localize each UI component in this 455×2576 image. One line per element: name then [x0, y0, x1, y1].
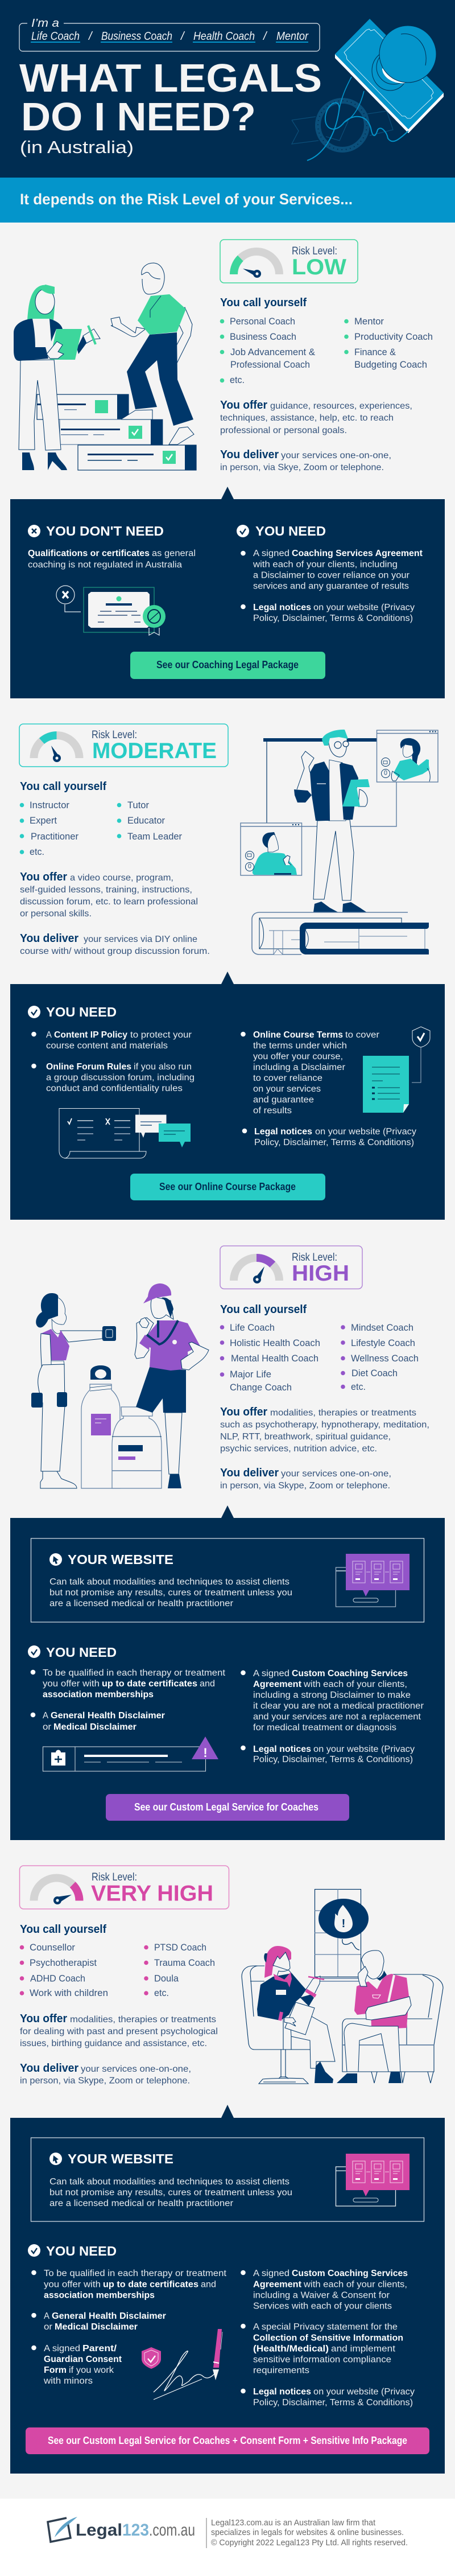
list: right column — [241, 1669, 424, 1764]
button: coaching package — [130, 652, 325, 679]
you call yourself: very high: PTSD Coach — [154, 1942, 206, 1953]
you deliver: low: You deliver — [220, 448, 279, 461]
footer text — [211, 2518, 408, 2548]
list: you need: services and any guarantee of results — [253, 582, 409, 591]
list: right column: Legal notices — [253, 2387, 311, 2397]
title: WHAT LEGALS — [19, 56, 322, 100]
text: qualifications: as general — [152, 549, 196, 558]
panel: very high risk requirements — [10, 2105, 445, 2474]
list: you need: with each of your clients, including — [253, 560, 398, 569]
you call yourself: low: Business Coach — [230, 331, 296, 342]
you offer: moderate: discussion forum, etc. to learn professional — [20, 897, 198, 907]
list: left column: General Health Disclaimer — [52, 2311, 166, 2321]
you deliver: moderate: your services via DIY online — [84, 935, 197, 944]
you call yourself: high: Wellness Coach — [351, 1353, 419, 1364]
heading: you need: YOU NEED — [46, 1005, 117, 1019]
list: left column: a group discussion forum, including — [46, 1073, 195, 1083]
you call yourself: low: Finance & — [354, 347, 396, 357]
you call yourself: very high: ADHD Coach — [30, 1973, 85, 1984]
title: DO I NEED? — [21, 94, 256, 139]
I'm a role box: Health Coach — [193, 30, 255, 43]
you call yourself: moderate: etc. — [30, 846, 44, 857]
list: left column: association memberships — [43, 1690, 154, 1699]
you deliver: low: your services one-on-one, — [281, 451, 391, 460]
illustration: online teacher on books — [241, 730, 438, 954]
you call yourself: very high: Psychotherapist — [30, 1957, 97, 1968]
illustration: counsellor and client — [242, 1889, 443, 2084]
illustration: fitness coach and client — [31, 1283, 209, 1488]
list: right column: and guarantee — [253, 1095, 314, 1105]
you deliver: very high: You deliver — [20, 2062, 78, 2075]
gauge: low — [230, 248, 283, 278]
list: right column: Legal notices — [253, 1744, 311, 1754]
risk level badge: moderate: MODERATE — [92, 739, 217, 763]
video window: left — [241, 823, 301, 875]
your website box: YOUR WEBSITE — [68, 1552, 173, 1567]
your website box: Can talk about modalities and techniques to assist clients — [49, 2177, 289, 2187]
you call yourself: moderate: Practitioner — [31, 831, 78, 842]
thought bubble with flame: ! — [342, 1917, 345, 1930]
list: left column: up to date certificates — [103, 2280, 198, 2289]
button: online course package: See our Online Course Package — [159, 1181, 296, 1192]
footer text: © Copyright 2022 Legal123 Pty Ltd. All rights reserved. — [211, 2538, 408, 2548]
list: right column: to cover — [345, 1030, 379, 1040]
you call yourself: very high — [20, 1923, 215, 1998]
subtitle: (in Australia) — [20, 137, 134, 157]
illustration: stamp and seal — [292, 19, 444, 161]
list: you need: Coaching Services Agreement — [292, 549, 423, 558]
you call yourself: low: Budgeting Coach — [354, 359, 427, 370]
you call yourself: low: Mentor — [354, 316, 384, 327]
list: left column: Guardian Consent — [44, 2355, 122, 2364]
you call yourself: moderate: You call yourself — [20, 780, 106, 793]
you deliver: high: You deliver — [220, 1467, 279, 1479]
illustration: medical disclaimer warning: ! — [203, 1746, 208, 1760]
client with dumbbells — [31, 1293, 116, 1488]
you offer: moderate: self-guided lessons, training, instructions, — [20, 885, 192, 895]
heading: you need: YOU NEED — [46, 2244, 117, 2258]
you call yourself: high — [220, 1303, 419, 1393]
you offer: high: You offer — [220, 1406, 267, 1418]
you offer: moderate: You offer — [20, 871, 67, 883]
button: custom legal service: See our Custom Legal Service for Coaches — [134, 1801, 318, 1813]
list: left column: Form — [44, 2365, 67, 2375]
list: right column: including a Waiver & Consent for — [253, 2290, 390, 2301]
heading: you need: YOU NEED — [46, 1645, 117, 1660]
you offer: high: psychic services, nutrition advice, etc. — [220, 1444, 377, 1454]
list: right column: on your website (Privacy — [313, 2387, 415, 2397]
risk level badge: low — [220, 240, 358, 283]
list: left column: association memberships — [44, 2290, 155, 2301]
risk level badge: very high: VERY HIGH — [91, 1882, 213, 1906]
list: right column: on your website (Privacy — [315, 1127, 416, 1137]
teacher figure — [294, 730, 370, 912]
I'm a role box: / — [88, 30, 93, 43]
your website box — [31, 1538, 424, 1622]
logo: Legal123: .com.au — [149, 2521, 195, 2540]
list: right column — [241, 2269, 415, 2408]
button: custom package: See our Custom Legal Service for Coaches + Consent Form + Sensitive Info Package — [48, 2435, 407, 2446]
you offer: very high: You offer — [20, 2013, 67, 2025]
stacked checklists — [37, 394, 196, 470]
list: right column: Online Course Terms — [253, 1030, 343, 1040]
button: online course package — [130, 1174, 325, 1200]
list: you need: on your website (Privacy — [313, 603, 415, 612]
you call yourself: high: Life Coach — [230, 1322, 275, 1333]
gauge: moderate — [30, 731, 83, 762]
list: left column: General Health Disclaimer — [51, 1711, 165, 1721]
you call yourself: low: Productivity Coach — [354, 331, 433, 342]
your website box: are a licensed medical or health practitioner — [49, 2199, 233, 2208]
you offer: low: professional or personal goals. — [220, 426, 347, 435]
you offer: moderate — [20, 871, 198, 919]
list: right column: Policy, Disclaimer, Terms & Conditions) — [253, 2398, 413, 2408]
illustration: certificate crossed out — [56, 586, 166, 635]
you call yourself: low: Personal Coach — [230, 316, 295, 327]
gauge: very high — [30, 1874, 83, 1904]
I'm a role box: I’m a — [31, 17, 59, 30]
list: right column: Policy, Disclaimer, Terms & Conditions) — [253, 1755, 413, 1764]
you offer: very high: issues, birthing guidance and assistance, etc. — [20, 2039, 207, 2048]
coach with whistle — [135, 1283, 209, 1488]
list: left column: you offer with — [43, 1679, 100, 1689]
you call yourself: very high: Counsellor — [30, 1942, 75, 1953]
logo: Legal123: 123 — [122, 2521, 149, 2540]
risk level badge: low: Risk Level: — [292, 245, 337, 257]
list: right column: on your website (Privacy — [313, 1744, 415, 1754]
you call yourself: moderate: Instructor — [30, 800, 69, 810]
list: left column — [31, 1030, 195, 1093]
list: right column: including a Disclaimer — [253, 1063, 345, 1072]
logo: Legal123: Legal — [76, 2521, 122, 2540]
header banner — [0, 0, 455, 178]
your website box: are a licensed medical or health practitioner — [49, 1599, 233, 1608]
woman with tablet — [14, 285, 100, 470]
risk level badge: high: HIGH — [292, 1261, 349, 1286]
gauge: high — [230, 1254, 283, 1283]
your website box: but not promise any results, cures or treatment unless you — [49, 2188, 292, 2198]
counsellor — [257, 1946, 335, 2083]
you deliver: high: in person, via Skype, Zoom or telephone. — [220, 1481, 390, 1491]
list: left column: to protect your — [130, 1030, 192, 1040]
list: right column: including a strong Disclaimer to make — [253, 1690, 411, 1700]
list: left column: Medical Disclaimer — [53, 1722, 136, 1732]
you call yourself: high: Holistic Health Coach — [230, 1338, 320, 1348]
list: left column: Online Forum Rules — [46, 1062, 131, 1072]
you call yourself: moderate: Expert — [30, 815, 57, 826]
list: left column — [31, 1668, 226, 1732]
list: right column: requirements — [253, 2365, 309, 2376]
I'm a role box: Mentor — [276, 30, 309, 43]
text: qualifications: Qualifications or certificates — [28, 549, 150, 558]
button: custom legal service — [106, 1794, 349, 1821]
you deliver: low: in person, via Skye, Zoom or telephone. — [220, 463, 384, 472]
I'm a role box — [19, 17, 320, 51]
you call yourself: low: You call yourself — [220, 297, 307, 309]
illustration: terms document and shield — [363, 1027, 430, 1113]
list: left column: with minors — [43, 2376, 93, 2386]
list: left column: conduct and confidentiality rules — [46, 1084, 183, 1093]
list: right column: Custom Coaching Services — [292, 1669, 408, 1678]
you call yourself: moderate: Educator — [127, 815, 165, 826]
intro band: It depends on the Risk Level of your Services... — [20, 191, 353, 208]
books — [252, 912, 429, 954]
heading: you need: YOU NEED — [255, 524, 326, 538]
you deliver: very high: your services one-on-one, — [81, 2064, 191, 2074]
list: right column: of results — [253, 1106, 292, 1116]
list: right column: A signed — [253, 2269, 289, 2278]
list: left column: or — [43, 1722, 51, 1732]
text: qualifications — [28, 549, 196, 570]
list: right column: A special Privacy statement for the — [253, 2322, 398, 2332]
right chair — [342, 1974, 443, 2083]
list: you need: A signed — [253, 549, 289, 558]
you deliver: low — [220, 448, 391, 472]
you call yourself: high: Lifestyle Coach — [351, 1338, 415, 1348]
list: right column: to cover reliance — [253, 1073, 322, 1083]
logo: Legal123 — [48, 2517, 195, 2542]
list: left column: Content IP Policy — [54, 1030, 127, 1040]
panel: low risk requirements — [10, 487, 445, 698]
thought bubble with flame — [318, 1899, 369, 1950]
list: right column: Agreement — [253, 2280, 301, 2289]
list: right column: for medical treatment or diagnosis — [253, 1723, 396, 1733]
you call yourself: high: Diet Coach — [351, 1368, 398, 1378]
you call yourself: high: You call yourself — [220, 1303, 307, 1316]
list: right column: Legal notices — [254, 1127, 312, 1137]
I'm a role box: Life Coach — [31, 30, 80, 43]
button: coaching package: See our Coaching Legal Package — [156, 659, 299, 670]
you offer: moderate: or personal skills. — [20, 909, 92, 919]
you call yourself: low — [220, 297, 433, 385]
illustration: consent signature with pen and shield — [142, 2329, 222, 2400]
text: qualifications: coaching is not regulated in Australia — [28, 560, 182, 570]
I'm a role box: / — [262, 30, 268, 43]
list: left column: A — [46, 1030, 52, 1040]
I'm a role box: / — [180, 30, 185, 43]
list: right column: Collection of Sensitive Information — [253, 2334, 403, 2343]
your website box: YOUR WEBSITE — [68, 2151, 173, 2166]
list: left column: up to date certificates — [102, 1679, 197, 1689]
you offer: low: guidance, resources, experiences, — [270, 401, 412, 411]
you call yourself: low: Job Advancement & — [230, 347, 316, 357]
window — [315, 1889, 361, 1981]
list: right column: (Health/Medical) — [253, 2344, 329, 2354]
list: left column — [31, 2269, 227, 2386]
panel: high risk requirements — [10, 1505, 445, 1840]
list: right column: Custom Coaching Services — [292, 2269, 408, 2278]
you offer: very high: for dealing with past and present psychological — [20, 2027, 218, 2036]
you deliver: moderate — [20, 932, 210, 956]
you deliver: moderate: You deliver — [20, 932, 78, 945]
you offer: very high: modalities, therapies or treatments — [70, 2015, 216, 2024]
you call yourself: moderate — [20, 780, 182, 857]
icon: website funnel — [336, 1554, 410, 1607]
footer text: Legal123.com.au is an Australian law firm that — [211, 2518, 376, 2528]
list: right column: Services with each of your clients — [253, 2302, 392, 2311]
you call yourself: moderate: Tutor — [127, 800, 149, 810]
list: right column: with each of your clients, — [303, 2280, 407, 2289]
list: left column: Parent/ — [82, 2344, 117, 2353]
you offer: high: such as psychotherapy, hypnotherapy, meditation, — [220, 1420, 429, 1430]
man with raised fist — [111, 263, 194, 445]
you offer: low — [220, 399, 412, 435]
list: right column: A signed — [253, 1669, 289, 1678]
client with sling — [337, 1950, 411, 2083]
list: left column: if you also run — [134, 1062, 192, 1072]
list: left column: you offer with — [44, 2280, 101, 2289]
risk level badge: moderate: Risk Level: — [92, 729, 137, 741]
risk level badge: very high — [19, 1866, 229, 1909]
you call yourself: high: Change Coach — [230, 1382, 292, 1393]
list: you need — [241, 549, 423, 623]
you call yourself: very high: You call yourself — [20, 1923, 106, 1936]
section: low risk illustration — [14, 263, 196, 470]
risk level badge: very high: Risk Level: — [92, 1871, 137, 1883]
you deliver: high — [220, 1467, 391, 1491]
list: left column: To be qualified in each therapy or treatment — [44, 2269, 227, 2278]
you call yourself: very high: Work with children — [30, 1987, 108, 1998]
video window: top right — [377, 730, 438, 782]
button: custom package — [26, 2427, 429, 2454]
icon: website funnel — [336, 2154, 410, 2206]
panel: moderate risk requirements — [10, 972, 445, 1220]
heading: you don't need: YOU DON'T NEED — [46, 524, 164, 538]
list: left column: if you work — [69, 2365, 114, 2375]
your website box: but not promise any results, cures or treatment unless you — [49, 1588, 292, 1598]
list: right column: Policy, Disclaimer, Terms & Conditions) — [254, 1138, 414, 1147]
risk level badge: high: Risk Level: — [292, 1252, 337, 1264]
I'm a role box: Business Coach — [101, 30, 172, 43]
list: right column: on your services — [253, 1084, 321, 1094]
list: right column: and implement — [331, 2344, 396, 2354]
list: right column: sensitive information compliance — [253, 2355, 391, 2364]
you call yourself: high: etc. — [351, 1381, 366, 1392]
list: left column: To be qualified in each therapy or treatment — [43, 1668, 226, 1678]
you call yourself: very high: etc. — [154, 1987, 169, 1998]
you call yourself: very high: Doula — [154, 1973, 179, 1984]
list: you need: Policy, Disclaimer, Terms & Conditions) — [253, 614, 413, 623]
you call yourself: low: Professional Coach — [230, 359, 310, 370]
you deliver: very high: in person, via Skype, Zoom or telephone. — [20, 2076, 190, 2085]
list: left column: and — [200, 1679, 215, 1689]
risk level badge: low: LOW — [292, 255, 346, 279]
you deliver: very high — [20, 2062, 191, 2085]
you call yourself: moderate: Team Leader — [127, 831, 182, 842]
list: right column: you offer your course, — [253, 1052, 343, 1061]
list: left column: or — [44, 2322, 52, 2332]
you call yourself: high: Mindset Coach — [351, 1322, 413, 1333]
title — [19, 56, 322, 139]
list: you need: a Disclaimer to cover reliance on your — [253, 570, 410, 581]
you call yourself: very high: Trauma Coach — [154, 1957, 215, 1968]
footer — [0, 2499, 455, 2576]
you offer: moderate: a video course, program, — [70, 873, 173, 883]
your website box: Can talk about modalities and techniques to assist clients — [49, 1577, 289, 1587]
you deliver: high: your services one-on-one, — [281, 1469, 391, 1479]
you call yourself: high: Major Life — [230, 1369, 271, 1380]
list: left column: Medical Disclaimer — [55, 2322, 138, 2332]
you call yourself: high: Mental Health Coach — [231, 1353, 318, 1364]
you offer: low: You offer — [220, 399, 267, 411]
list: left column: A — [44, 2311, 50, 2321]
illustration: forum rules — [59, 1109, 191, 1158]
list: right column: with each of your clients, — [303, 1680, 407, 1689]
you offer: high: modalities, therapies or treatments — [270, 1408, 416, 1418]
risk level badge: high — [220, 1246, 362, 1289]
you offer: high: NLP, RTT, breathwork, spiritual guidance, — [220, 1432, 391, 1442]
list: left column: course content and materials — [46, 1041, 168, 1051]
list: left column: and — [201, 2280, 216, 2289]
footer text: specializes in legals for websites & online businesses. — [211, 2528, 404, 2537]
list: you need: Legal notices — [253, 603, 311, 612]
risk level badge: moderate — [19, 724, 228, 767]
list: right column: the terms under which — [253, 1041, 347, 1051]
list: right column: it clear you are not a medical practitioner — [253, 1701, 424, 1711]
you offer: high — [220, 1406, 429, 1454]
intro band — [0, 178, 455, 223]
list: right column: and your services are not a replacement — [253, 1712, 421, 1722]
your website box — [31, 2138, 424, 2221]
list: left column: A — [43, 1711, 49, 1721]
left chair — [242, 1966, 311, 2084]
you deliver: moderate: course with/ without group discussion forum. — [20, 947, 210, 956]
bottles — [81, 1365, 162, 1488]
list: right column: Agreement — [253, 1680, 301, 1689]
list: right column — [241, 1030, 416, 1147]
you call yourself: low: etc. — [230, 375, 245, 385]
list: left column: A signed — [44, 2344, 80, 2353]
you offer: very high — [20, 2013, 218, 2048]
illustration: medical disclaimer warning — [43, 1736, 218, 1771]
you offer: low: techniques, assistance, help, etc. to reach — [220, 413, 394, 423]
